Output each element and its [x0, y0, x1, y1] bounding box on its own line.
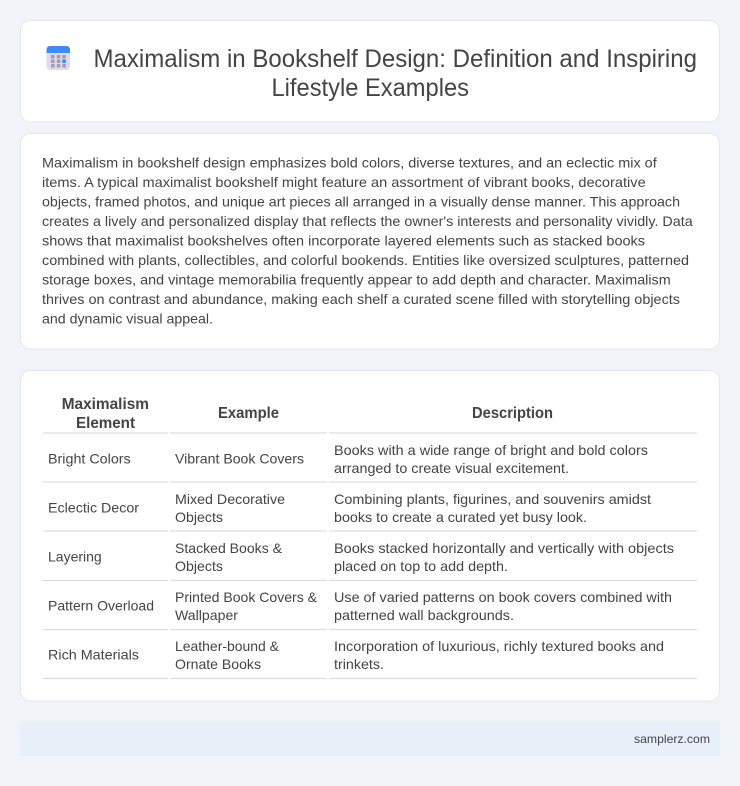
panel: intro text: [20, 134, 720, 349]
table row: Bright Colors: Bright Colors: [48, 450, 131, 466]
table row: Rich Materials: Ornate Books: [175, 656, 261, 672]
title: Lifestyle Examples: [272, 74, 469, 102]
table header: [43, 396, 697, 433]
table row: Eclectic Decor: Objects: [175, 509, 223, 525]
text block: intro paragraph: storage boxes, and vintage memorabilia frequently appear to add depth and character. Maximalism: [42, 272, 671, 288]
text block: intro paragraph: items. A typical maximalist bookshelf might feature an assortment of vibrant books, decorative: [42, 174, 646, 190]
table row: Eclectic Decor: Eclectic Decor: [48, 500, 139, 516]
text block: intro paragraph: and dynamic visual appeal.: [42, 310, 213, 326]
table row: Eclectic Decor: Combining plants, figurines, and souvenirs amidst: [334, 491, 651, 507]
table row: Eclectic Decor: books to create a curated yet busy look.: [334, 509, 587, 525]
table row: Pattern Overload: [43, 589, 697, 630]
table header: Example: [218, 405, 279, 422]
table row: Pattern Overload: Printed Book Covers &: [175, 589, 318, 605]
table row: Eclectic Decor: [43, 491, 697, 531]
table row: Layering: placed on top to add depth.: [334, 558, 508, 574]
table row: Layering: Layering: [48, 548, 102, 564]
footer bar: [20, 722, 720, 756]
table header: Description: [472, 405, 553, 422]
table header: Maximalism: [62, 396, 149, 413]
icon: calendar: [46, 46, 70, 70]
text block: intro paragraph: combined with plants, collectibles, and colorful bookends. Entities like oversized sculptures, patterned: [42, 252, 689, 268]
table row: Bright Colors: Vibrant Book Covers: [175, 450, 304, 466]
text block: intro paragraph: creates a lively and personalized display that reflects the owner's interests and personality vividly. Data: [42, 213, 693, 229]
panel: table: [20, 370, 720, 701]
table row: Layering: Books stacked horizontally and vertically with objects: [334, 540, 674, 556]
text block: intro paragraph: thrives on contrast and abundance, making each shelf a curated scene filled with storytelling objects: [42, 291, 680, 307]
table row: Rich Materials: Incorporation of luxurious, richly textured books and: [334, 638, 664, 654]
table row: Bright Colors: Books with a wide range of bright and bold colors: [334, 442, 648, 458]
panel: header: [20, 20, 720, 122]
table row: Layering: [43, 540, 697, 580]
table row: Rich Materials: Leather-bound &: [175, 638, 280, 654]
table row: Pattern Overload: Wallpaper: [175, 607, 238, 623]
table row: Rich Materials: [43, 638, 697, 678]
table header: Element: [76, 415, 136, 432]
title: [94, 45, 697, 102]
table row: Eclectic Decor: Mixed Decorative: [175, 491, 285, 507]
table row: Bright Colors: arranged to create visual excitement.: [334, 460, 569, 476]
table row: Bright Colors: [43, 442, 697, 482]
table row: Rich Materials: trinkets.: [334, 656, 384, 672]
text block: intro paragraph: shows that maximalist bookshelves often incorporate layered elements such as stacked books: [42, 232, 645, 248]
footer text: samplerz.com: [634, 732, 710, 746]
table row: Pattern Overload: Use of varied patterns on book covers combined with: [334, 589, 672, 605]
table row: Pattern Overload: patterned wall backgrounds.: [334, 607, 514, 623]
table row: Layering: Objects: [175, 558, 223, 574]
title: Maximalism in Bookshelf Design: Definition and Inspiring: [94, 45, 697, 73]
table row: Rich Materials: Rich Materials: [48, 646, 139, 662]
text block: intro paragraph: [42, 154, 693, 326]
text block: intro paragraph: Maximalism in bookshelf design emphasizes bold colors, diverse textures, and an eclectic mix of: [42, 154, 657, 170]
table row: Layering: Stacked Books &: [175, 540, 283, 556]
text block: intro paragraph: objects, framed photos, and unique art pieces all arranged in a visually dense manner. This approach: [42, 194, 680, 210]
table row: Pattern Overload: Pattern Overload: [48, 598, 154, 614]
